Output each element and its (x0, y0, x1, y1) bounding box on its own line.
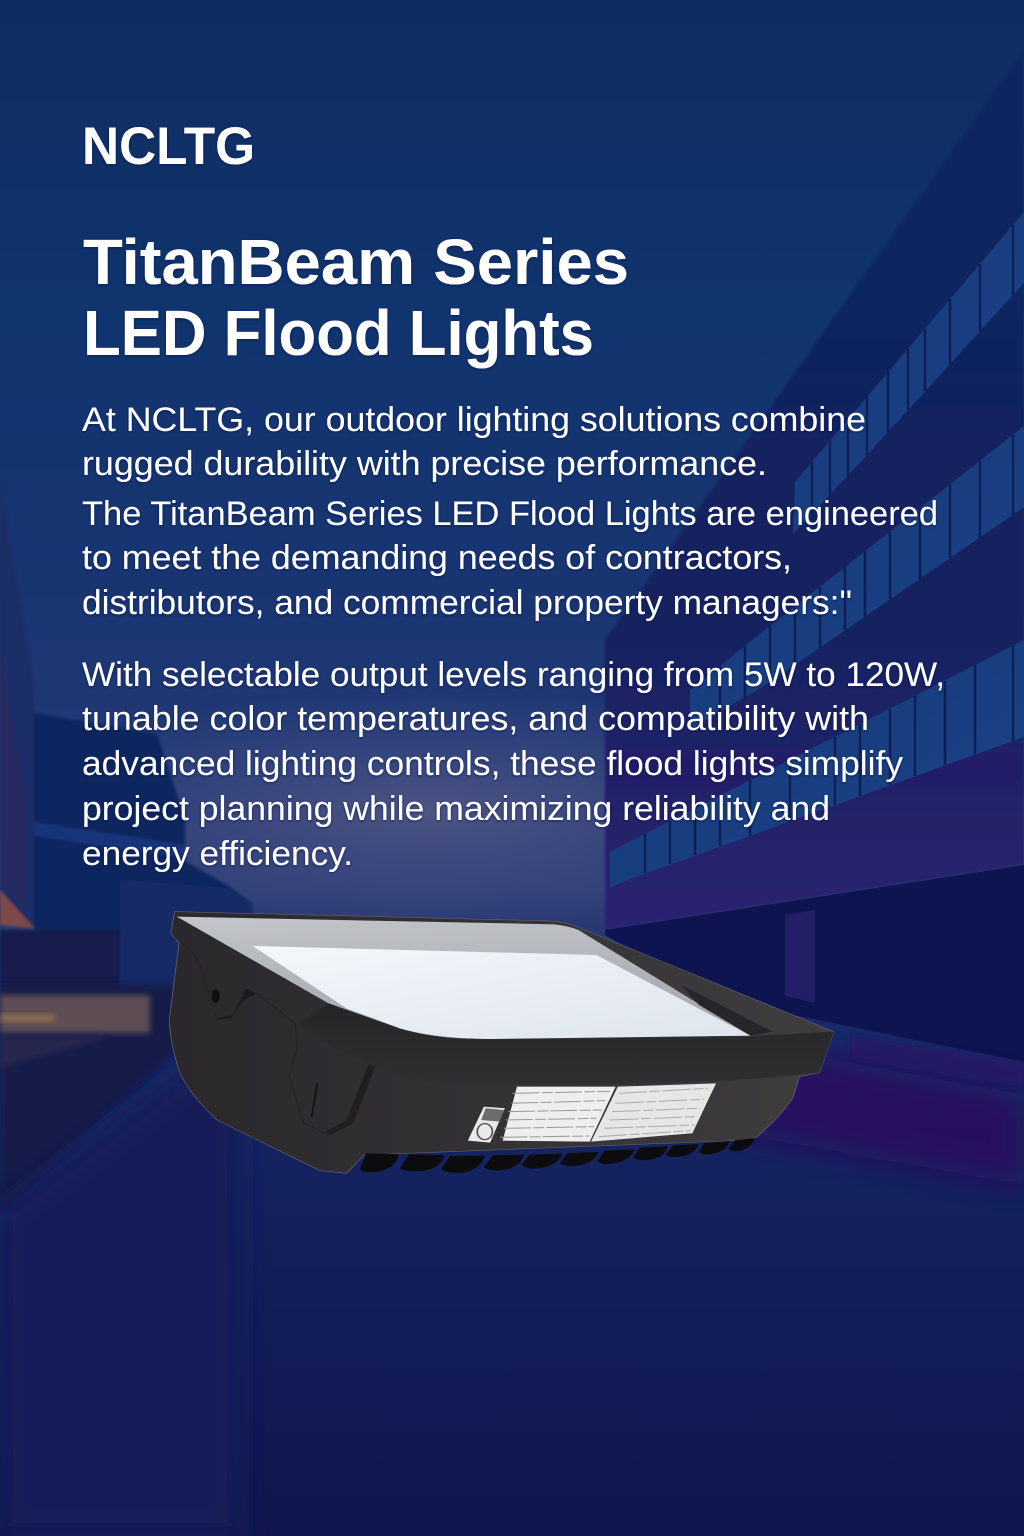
window row 3 (610, 640, 1024, 888)
title: TitanBeam Series (83, 226, 629, 298)
side panel outline (181, 943, 329, 1135)
intro paragraph: to meet the demanding needs of contractors, (82, 539, 792, 577)
title (83, 226, 629, 369)
detail paragraph: With selectable output levels ranging from 5W to 120W, (82, 656, 945, 694)
product: LED flood light (170, 912, 834, 1173)
ground floor (605, 865, 1024, 1062)
housing body (170, 912, 834, 1173)
detail paragraph: tunable color temperatures, and compatibility with (82, 700, 869, 738)
lit lens panel (253, 946, 750, 1039)
mounting bracket tab (210, 988, 257, 1020)
window row 1 (793, 212, 1024, 534)
ventilation slots (360, 1138, 755, 1173)
detail paragraph: energy efficiency. (82, 835, 353, 873)
intro paragraph: The TitanBeam Series LED Flood Lights are engineered (82, 495, 938, 533)
intro paragraph: distributors, and commercial property managers:" (82, 584, 852, 622)
background: right office building (605, 50, 1024, 1062)
side strap (326, 1064, 375, 1135)
detail paragraph: project planning while maximizing reliability and (82, 790, 830, 828)
brand logo: NCLTG (82, 117, 255, 176)
inner wall (681, 985, 773, 1036)
intro paragraph (82, 401, 938, 622)
background: street lights and road (0, 985, 250, 1536)
background: purple pavement glow (720, 1035, 1024, 1185)
detail paragraph (82, 656, 945, 873)
detail paragraph: advanced lighting controls, these flood lights simplify (82, 745, 903, 783)
intro paragraph: rugged durability with precise performance. (82, 445, 767, 483)
background: left building (0, 478, 253, 990)
reflector (177, 917, 750, 1038)
window row 2 (690, 426, 1024, 730)
title: LED Flood Lights (83, 297, 594, 369)
intro paragraph: At NCLTG, our outdoor lighting solutions combine (82, 401, 866, 439)
front rim band (297, 1003, 834, 1084)
product label (468, 1083, 716, 1143)
